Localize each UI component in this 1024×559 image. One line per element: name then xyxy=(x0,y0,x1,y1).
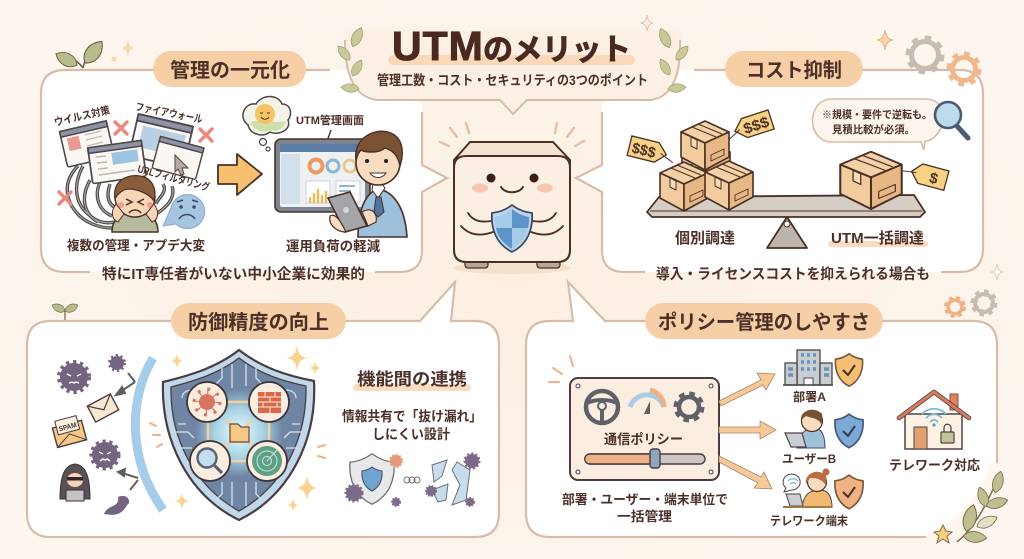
icon: sad face bubble xyxy=(163,195,205,229)
heading pill: コスト抑制 xyxy=(725,51,863,87)
label: ユーザーB: ユーザーB xyxy=(782,452,836,466)
control panel xyxy=(570,378,719,480)
circuit lines xyxy=(176,364,302,506)
speech bubble: caution note xyxy=(812,99,944,150)
panel: コスト抑制 xyxy=(576,30,1003,283)
face xyxy=(486,174,496,182)
caption: UTM一括調達: UTM一括調達 xyxy=(831,229,924,247)
icon: building, department A xyxy=(783,350,833,385)
slider xyxy=(585,449,705,468)
balance board and fulcrum xyxy=(647,195,925,248)
label: 通信ポリシー: 通信ポリシー xyxy=(604,432,683,447)
icon: gears lower right xyxy=(947,293,994,315)
icon: telework woman xyxy=(783,468,832,507)
text: しにくい設計: しにくい設計 xyxy=(372,427,450,442)
rays xyxy=(549,356,573,382)
shield xyxy=(492,205,532,252)
caption: 運用負荷の軽減: 運用負荷の軽減 xyxy=(286,238,380,254)
panel: 防御精度の向上 xyxy=(27,282,499,537)
illustration: scattered tools with tangled wires: URLフィルタリング xyxy=(136,162,211,194)
illustration: scattered tools with tangled wires: ウイルス対策 xyxy=(53,103,112,129)
arrow xyxy=(218,154,262,195)
icon: magnifier xyxy=(935,102,968,138)
icon: house with wifi and lock xyxy=(899,392,969,449)
icon: blue shield xyxy=(835,414,863,448)
illustration: management screen and man with tablet xyxy=(275,130,407,237)
icon: orange shield C xyxy=(835,475,863,509)
heading pill: 防御精度の向上: 防御精度の向上 xyxy=(188,311,329,334)
node: virus xyxy=(187,382,227,422)
node: magnifier xyxy=(190,441,230,481)
label: 部署A: 部署A xyxy=(793,389,826,404)
title text: のメリット xyxy=(483,34,630,67)
caption: 複数の管理・アプデ大変: 複数の管理・アプデ大変 xyxy=(67,238,205,253)
label: テレワーク端末: テレワーク端末 xyxy=(770,513,848,528)
wreath: left leaves xyxy=(335,26,366,93)
icon: steering wheel xyxy=(586,391,618,423)
price tag: $$$ left xyxy=(627,136,677,166)
sparkles and rays around shield xyxy=(150,345,325,512)
big shield with linked functions xyxy=(163,350,314,520)
icon: orange shield A xyxy=(835,354,863,386)
heading: 機能間の連携: 機能間の連携 xyxy=(357,369,467,389)
heading pill: 管理の一元化 xyxy=(153,51,306,87)
speech bubble: caution note: ※規模・要件で逆転も。 xyxy=(822,108,932,121)
box: UTM bundled procurement xyxy=(840,152,902,209)
arrows to targets xyxy=(719,373,776,489)
label: UTM管理画面: UTM管理画面 xyxy=(296,113,364,127)
decoration: top-left leaves xyxy=(53,37,135,70)
central character: UTM appliance with shield xyxy=(440,123,584,274)
icon: gears xyxy=(877,30,978,83)
icon: intact shield vs broken shield xyxy=(346,454,479,506)
node: radar xyxy=(247,441,287,481)
heading pill: ポリシー管理のしやすさ: ポリシー管理のしやすさ xyxy=(658,311,870,334)
subtitle: 管理工数・コスト・セキュリティの3つのポイント xyxy=(377,72,648,88)
threats: viruses, mail, hacker: SPAM xyxy=(58,422,78,433)
heading pill: ポリシー管理のしやすさ xyxy=(645,303,883,339)
folder xyxy=(230,424,249,442)
thought cloud with smiling sun xyxy=(243,96,290,151)
icon: gauge xyxy=(630,390,664,414)
caption: 個別調達: 個別調達 xyxy=(675,230,735,247)
panel: 管理の一元化 xyxy=(41,51,447,283)
arrows between nodes xyxy=(208,402,269,461)
rays xyxy=(440,123,584,146)
caption: 一括管理: 一括管理 xyxy=(617,509,672,524)
title block xyxy=(335,15,691,114)
boxes: individual procurement xyxy=(660,121,753,211)
label: テレワーク対応: テレワーク対応 xyxy=(889,457,980,473)
heading pill: 管理の一元化: 管理の一元化 xyxy=(170,59,290,82)
text: 特にIT専任者がいない中小企業に効果的: 特にIT専任者がいない中小企業に効果的 xyxy=(102,265,365,283)
price tag: $$$ right xyxy=(724,110,774,143)
decoration: branch and star bottom right xyxy=(926,463,1009,559)
heading pill: 防御精度の向上 xyxy=(171,303,346,339)
node: firewall xyxy=(249,382,289,422)
price tag: $ xyxy=(899,159,949,190)
title text: UTM xyxy=(392,23,484,69)
icon: gear xyxy=(677,395,701,419)
icon: user B with laptop xyxy=(785,410,825,448)
price tag: $: $ xyxy=(927,169,940,188)
threats: viruses, mail, hacker xyxy=(51,356,138,515)
icon: worried person xyxy=(112,176,158,232)
decoration: sprout xyxy=(50,302,80,321)
panel: ポリシー管理のしやすさ xyxy=(526,282,1009,559)
title bubble xyxy=(346,30,681,114)
illustration: scattered tools with tangled wires: ファイアウォール xyxy=(134,101,204,126)
illustration: scattered tools with tangled wires xyxy=(53,101,212,228)
heading pill: コスト抑制: コスト抑制 xyxy=(746,59,842,82)
price tag: $$$ left: $$$ xyxy=(630,140,658,162)
blue barrier arc xyxy=(135,358,163,510)
wreath: right leaves xyxy=(656,27,691,93)
deflected arrows xyxy=(116,373,138,490)
speech bubble: caution note: 見積比較が必須。 xyxy=(832,123,915,136)
text: 導入・ライセンスコストを抑えられる場合も: 導入・ライセンスコストを抑えられる場合も xyxy=(656,265,930,283)
text: 情報共有で「抜け漏れ」: 情報共有で「抜け漏れ」 xyxy=(342,408,482,424)
arms xyxy=(461,213,563,234)
title highlight xyxy=(388,55,635,65)
caption: 部署・ユーザー・端末単位で: 部署・ユーザー・端末単位で xyxy=(562,492,728,507)
price tag: $$$ right: $$$ xyxy=(741,113,772,138)
